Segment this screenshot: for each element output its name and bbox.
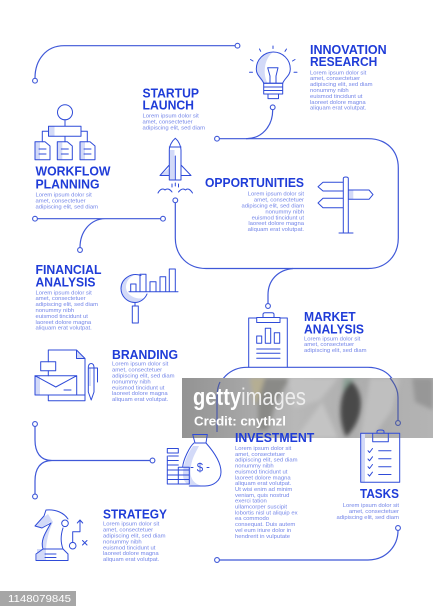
text: workflow body: Lorem ipsum dolor sit — [36, 193, 92, 199]
heading: market analysis: MARKET — [304, 310, 356, 324]
connector: market branch — [266, 268, 293, 308]
icon: coins and money bag: $ — [197, 462, 204, 474]
text: opportunities body: Lorem ipsum dolor sit — [248, 192, 304, 198]
watermark credit: Credit: cnythzl — [194, 414, 286, 429]
heading: startup launch — [142, 86, 199, 112]
icon: tasks clipboard — [361, 430, 400, 482]
text: innovation body: amet, consectetuer — [310, 76, 360, 82]
connector: strategy fork — [33, 422, 155, 499]
text: investment body: ullamcorper suscipit — [235, 504, 287, 510]
icon: light bulb — [250, 46, 297, 99]
watermark logotype: gettyimages — [193, 384, 306, 411]
text: strategy body: euismod tincidunt ut — [103, 545, 156, 551]
text: financial body: laoreet dolore magna — [36, 320, 92, 326]
heading: workflow planning: WORKFLOW — [36, 165, 111, 179]
text: investment body: laoreet dolore magna — [235, 475, 291, 481]
text: investment body: lobortis nisl ut aliquip ex — [235, 510, 298, 516]
heading: financial analysis: FINANCIAL — [36, 263, 102, 277]
text: investment body: ea commodo — [235, 516, 270, 522]
connector dot over watermark — [396, 421, 400, 425]
heading: market analysis: ANALYSIS — [304, 322, 364, 336]
icon: market clipboard — [249, 313, 287, 367]
text: investment body: euismod tincidunt ut — [235, 469, 288, 475]
text: branding body: euismod tincidunt ut — [112, 385, 165, 391]
text: investment body: nonummy nibh — [235, 464, 274, 470]
text: branding body: laoreet dolore magna — [112, 391, 168, 397]
text: startup body: adipiscing elit, sed diam — [142, 126, 205, 132]
text: opportunities body: laoreet dolore magna — [248, 221, 305, 227]
text: financial body: nonummy nibh — [36, 308, 74, 314]
text: branding body: adipiscing elit, sed diam — [112, 374, 175, 380]
text: investment body: aliquam erat volutpat. — [235, 481, 292, 487]
heading: innovation research: RESEARCH — [310, 55, 377, 69]
text: financial body: aliquam erat volutpat. — [36, 326, 92, 332]
text: strategy body: adipiscing elit, sed diam — [103, 534, 166, 540]
icon: rocket — [158, 138, 192, 193]
text: tasks body: Lorem ipsum dolor sit — [343, 503, 399, 509]
text: branding body: aliquam erat volutpat. — [112, 397, 169, 403]
watermark band — [182, 378, 433, 438]
text: financial body: adipiscing elit, sed diam — [36, 302, 98, 308]
text: opportunities body: amet, consectetuer — [254, 198, 304, 204]
connector: market fork — [217, 367, 400, 425]
heading: financial analysis: ANALYSIS — [36, 276, 96, 290]
text: tasks body: amet, consectetuer — [349, 509, 399, 515]
text: investment body: Ut wisi enim ad minim — [235, 487, 292, 493]
heading: innovation research: INNOVATION — [310, 43, 387, 57]
heading: workflow planning — [36, 165, 111, 191]
heading: strategy: STRATEGY — [103, 508, 168, 522]
text: innovation body: laoreet dolore magna — [310, 100, 366, 106]
text: opportunities body: adipiscing elit, sed diam — [241, 204, 304, 210]
heading: opportunities: OPPORTUNITIES — [205, 176, 304, 190]
text: investment body: hendrerit in vulputate — [235, 534, 291, 540]
heading: workflow planning: PLANNING — [36, 177, 100, 191]
text: opportunities body: nonummy nibh — [265, 209, 304, 215]
text: market body: amet, consectetuer — [304, 342, 354, 348]
connector: main loop — [173, 136, 398, 268]
text: investment body: consequat. Duis autem — [235, 522, 295, 528]
text: innovation body: adipiscing elit, sed diam — [310, 82, 373, 88]
text: market body: adipiscing elit, sed diam — [304, 348, 367, 354]
connector: top line — [33, 43, 240, 83]
connector: bulb branch — [246, 105, 275, 139]
text: strategy body: laoreet dolore magna — [103, 551, 159, 557]
text: financial body: Lorem ipsum dolor sit — [36, 290, 92, 296]
heading: investment: INVESTMENT — [235, 431, 315, 445]
text: innovation body: nonummy nibh — [310, 88, 349, 94]
text: innovation body: Lorem ipsum dolor sit — [310, 70, 367, 76]
connector: financial line — [33, 216, 165, 252]
connector segments over watermark — [217, 378, 398, 432]
icon: workflow chart — [35, 105, 95, 160]
heading: financial analysis — [36, 263, 102, 290]
text: workflow body: amet, consectetuer — [36, 199, 86, 205]
text: branding body: Lorem ipsum dolor sit — [112, 362, 169, 368]
icon: document, envelope and pen — [35, 350, 98, 401]
heading: tasks: TASKS — [360, 487, 399, 501]
badge: image id: 1148079845 — [8, 594, 71, 605]
icon: signpost — [318, 177, 373, 233]
text: innovation body: aliquam erat volutpat. — [310, 106, 367, 112]
text: strategy body: aliquam erat volutpat. — [103, 557, 160, 563]
text: branding body: amet, consectetuer — [112, 368, 162, 374]
text: workflow body: adipiscing elit, sed diam — [36, 204, 98, 210]
heading: branding: BRANDING — [112, 348, 178, 362]
icon: magnifier with bar chart — [121, 269, 178, 323]
text: investment body: Lorem ipsum dolor sit — [235, 446, 292, 452]
text: investment body: exerci tation — [235, 499, 267, 505]
text: tasks body: adipiscing elit, sed diam — [336, 515, 399, 521]
heading: innovation research — [310, 43, 387, 69]
connector: bottom line — [215, 526, 400, 562]
text: startup body: Lorem ipsum dolor sit — [142, 114, 199, 120]
text: financial body: amet, consectetuer — [36, 296, 86, 302]
text: investment body: veniam, quis nostrud — [235, 493, 289, 499]
text: strategy body: Lorem ipsum dolor sit — [103, 522, 160, 528]
text: opportunities body: aliquam erat volutpat. — [248, 227, 304, 233]
text: innovation body: euismod tincidunt ut — [310, 94, 363, 100]
text: market body: Lorem ipsum dolor sit — [304, 336, 361, 342]
text: investment body: vel eum iriure dolor in — [235, 528, 291, 534]
text: strategy body: amet, consectetuer — [103, 528, 153, 534]
text: strategy body: nonummy nibh — [103, 539, 142, 545]
text: startup body: amet, consectetuer — [142, 120, 193, 126]
icon: chess knight and tactics — [35, 510, 87, 560]
badge: image id — [0, 591, 76, 606]
heading: market analysis — [304, 310, 364, 336]
icon: coins and money bag — [167, 434, 221, 486]
heading: startup launch: STARTUP — [142, 86, 199, 100]
heading: startup launch: LAUNCH — [142, 98, 194, 112]
text: investment body: adipiscing elit, sed diam — [235, 458, 298, 464]
text: opportunities body: euismod tincidunt ut — [252, 215, 304, 221]
text: financial body: euismod tincidunt ut — [36, 314, 88, 320]
text: branding body: nonummy nibh — [112, 379, 151, 385]
text: investment body: amet, consectetuer — [235, 452, 285, 458]
